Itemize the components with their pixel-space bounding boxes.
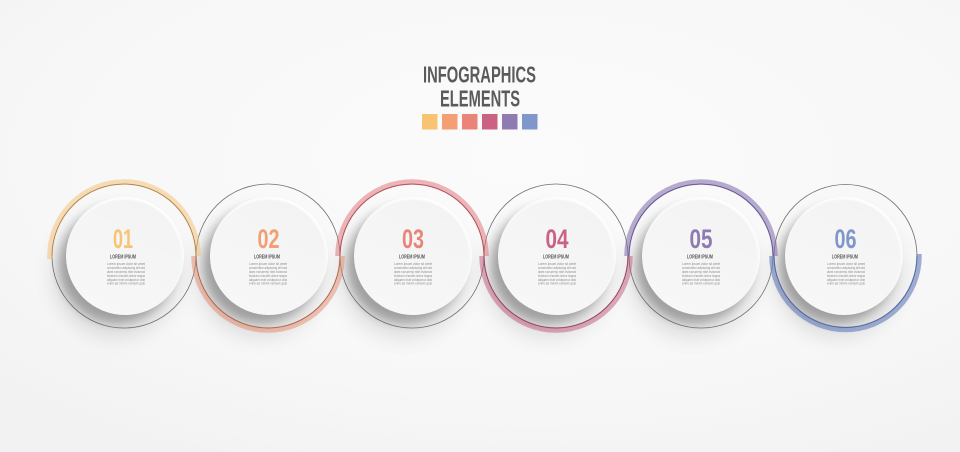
disk 5 [642, 197, 760, 315]
step 3 [347, 197, 472, 323]
body text 4: aliquam erat volutpat ut wisi [538, 278, 576, 282]
body text 6: diam nonummy nibh euismod [827, 270, 865, 274]
number 5: 05 [690, 224, 712, 254]
disk 3 [354, 197, 472, 315]
body text 6: aliquam erat volutpat ut wisi [827, 278, 865, 282]
body text 6: Lorem ipsum dolor sit amet [827, 262, 865, 266]
body text 3: enim ad minim veniam quis [394, 282, 432, 286]
disk face 4 [500, 200, 614, 314]
disk shadow 5 [636, 207, 752, 323]
body text 3: consectetur adipiscing elit sed [394, 266, 432, 270]
body text 3 [394, 262, 432, 286]
body text 5: Lorem ipsum dolor sit amet [682, 262, 720, 266]
number 3: 03 [402, 224, 424, 254]
heading 6: LOREM IPSUM [832, 254, 858, 260]
body text 6 [827, 262, 865, 286]
body text 5: diam nonummy nibh euismod [682, 270, 720, 274]
disk face 6 [786, 200, 900, 314]
number 2: 02 [258, 224, 280, 254]
step 1 [59, 197, 184, 323]
title [423, 62, 536, 112]
body text 2: Lorem ipsum dolor sit amet [249, 262, 287, 266]
body text 1: enim ad minim veniam quis [107, 282, 145, 286]
body text 1: aliquam erat volutpat ut wisi [107, 278, 145, 282]
step 4 [491, 197, 616, 323]
body text 5: tincidunt ut laoreet dolore magna [682, 274, 720, 278]
body text 3: tincidunt ut laoreet dolore magna [394, 274, 432, 278]
body text 1: diam nonummy nibh euismod [107, 270, 145, 274]
body text 6: enim ad minim veniam quis [827, 282, 865, 286]
disk shadow 6 [779, 207, 895, 323]
body text 3: diam nonummy nibh euismod [394, 270, 432, 274]
disk 2 [210, 197, 328, 315]
number 1: 01 [113, 224, 133, 254]
body text 3: aliquam erat volutpat ut wisi [394, 278, 432, 282]
disk face 5 [644, 200, 758, 314]
disk 6 [785, 197, 903, 315]
body text 4 [538, 262, 576, 286]
body text 4: consectetur adipiscing elit sed [538, 266, 576, 270]
body text 2: consectetur adipiscing elit sed [249, 266, 287, 270]
body text 5 [682, 262, 720, 286]
step 2 [203, 197, 328, 323]
wide soft shadows [52, 210, 902, 338]
body text 6: tincidunt ut laoreet dolore magna [827, 274, 865, 278]
body text 5: aliquam erat volutpat ut wisi [682, 278, 720, 282]
body text 1 [107, 262, 145, 286]
body text 5: consectetur adipiscing elit sed [682, 266, 720, 270]
heading 5: LOREM IPSUM [687, 254, 713, 260]
body text 1: consectetur adipiscing elit sed [107, 266, 145, 270]
disk face 2 [212, 200, 326, 314]
colour swatches [422, 114, 538, 130]
coloured arc 5 [627, 182, 775, 256]
body text 2: enim ad minim veniam quis [249, 282, 287, 286]
step 5 [636, 197, 760, 323]
thin outline rings [52, 184, 917, 328]
body text 4: Lorem ipsum dolor sit amet [538, 262, 576, 266]
disk 1 [66, 197, 184, 315]
step 6 [779, 197, 903, 323]
number 4: 04 [546, 224, 568, 254]
disk face 3 [356, 200, 470, 314]
body text 5: enim ad minim veniam quis [682, 282, 720, 286]
body text 4: tincidunt ut laoreet dolore magna [538, 274, 576, 278]
body text 2: tincidunt ut laoreet dolore magna [249, 274, 287, 278]
coloured arc 3 [338, 182, 486, 256]
heading 4: LOREM IPSUM [543, 254, 569, 260]
heading 3: LOREM IPSUM [399, 254, 425, 260]
coloured arc 2 [194, 256, 342, 330]
body text 1: Lorem ipsum dolor sit amet [107, 262, 145, 266]
heading 1: LOREM IPSUM [110, 254, 136, 260]
disk shadow 4 [491, 207, 607, 323]
coloured arc 4 [482, 256, 630, 330]
coloured arc 1 [50, 182, 198, 259]
heading 2: LOREM IPSUM [254, 254, 280, 260]
body text 2: diam nonummy nibh euismod [249, 270, 287, 274]
coloured arc 6 [772, 254, 919, 330]
body text 1: tincidunt ut laoreet dolore magna [107, 274, 145, 278]
body text 2 [249, 262, 287, 286]
disk face 1 [68, 200, 182, 314]
disk shadow 3 [347, 207, 463, 323]
body text 4: enim ad minim veniam quis [538, 282, 576, 286]
number 6: 06 [834, 224, 856, 254]
body text 3: Lorem ipsum dolor sit amet [394, 262, 432, 266]
body text 4: diam nonummy nibh euismod [538, 270, 576, 274]
disk 4 [498, 197, 616, 315]
disk shadow 2 [203, 207, 319, 323]
body text 6: consectetur adipiscing elit sed [827, 266, 865, 270]
disk shadow 1 [59, 207, 175, 323]
body text 2: aliquam erat volutpat ut wisi [249, 278, 287, 282]
title: ELEMENTS [440, 86, 520, 112]
title: INFOGRAPHICS [423, 62, 536, 88]
